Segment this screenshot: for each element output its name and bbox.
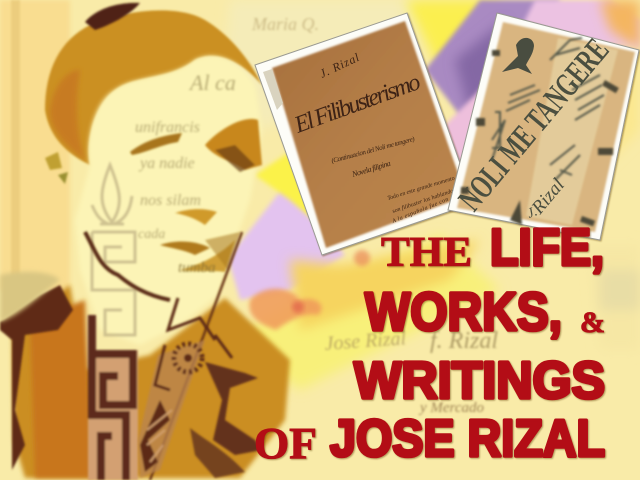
handwriting: script over the face: cada: [138, 227, 165, 242]
handwriting: script over the face: tumba: [178, 260, 216, 276]
lotus ornament and pale meander on the face: [92, 165, 135, 335]
handwriting: script over the face: Al ca: [188, 70, 236, 95]
title line: WRITINGS: WRITINGS: [354, 352, 605, 410]
handwriting: faded script behind the title: Jose Rizal: [324, 327, 407, 355]
handwritten cover text: son filibuster los hablando: [391, 187, 454, 215]
signature: Rizal: [527, 175, 569, 219]
handwriting: faded script behind the title: y Mercado: [418, 400, 484, 416]
collar line and dark stroke: [85, 232, 170, 300]
handwritten cover text: El Filibusterismo: [290, 69, 424, 139]
handwriting: script over the face: ya nadie: [138, 155, 195, 172]
title line: OF JOSE RIZAL: OF: [254, 419, 317, 468]
portrait jacket and shoulders: [12, 285, 290, 478]
floral ornament band: [138, 298, 262, 478]
portrait facial features: [45, 119, 262, 272]
handwriting: faded script behind the title: Maria Q.: [251, 14, 319, 34]
handwriting: script over the face: nos silam: [140, 192, 201, 209]
top hair mark: [85, 3, 140, 30]
title: [254, 219, 605, 468]
title line: THE LIFE,: THE: [381, 230, 472, 276]
photo: El Filibusterismo manuscript: [255, 13, 474, 255]
handwritten cover text: [290, 50, 456, 225]
foliage and key ornaments: [492, 38, 604, 180]
title line: THE LIFE,: [381, 219, 604, 277]
portrait: Jose Rizal: [0, 3, 290, 480]
diagonal edge of the portrait: [150, 232, 242, 480]
title line: OF JOSE RIZAL: JOSE RIZAL: [330, 410, 605, 468]
portrait hair: [45, 10, 262, 165]
book cover: [272, 21, 466, 248]
title line: WORKS, &: WORKS,: [365, 282, 562, 342]
portrait face: [75, 56, 262, 345]
handwritten cover text: Novela filipina: [350, 159, 392, 179]
handwriting: faded script behind the title: f. Rizal: [430, 328, 498, 354]
meander key pattern: [88, 315, 138, 480]
silhouette head: [502, 38, 534, 74]
title line: WORKS, &: &: [580, 306, 605, 339]
photo frame: [448, 13, 639, 240]
handwritten cover text: Todo en este grande momento: [387, 176, 456, 202]
photo frame: [255, 13, 474, 255]
photo: Noli Me Tangere cover: J.: [525, 204, 540, 222]
title line: THE LIFE,: LIFE,: [490, 219, 604, 277]
book cover: [457, 22, 635, 232]
dark bands along the spine: [461, 50, 619, 226]
handwriting: faded script behind the title: [251, 14, 498, 416]
photo: Noli Me Tangere cover: [448, 13, 639, 240]
handwritten cover text: J. Rizal: [317, 50, 362, 81]
handwriting: script over the face: [135, 70, 236, 276]
handwritten cover text: A la española fue con: [390, 196, 449, 225]
dark cape and collar: [0, 285, 73, 470]
handwriting: script over the face: unifrancis: [135, 119, 200, 136]
handwritten cover text: (Continuacion del Noli me tangere): [330, 135, 416, 165]
